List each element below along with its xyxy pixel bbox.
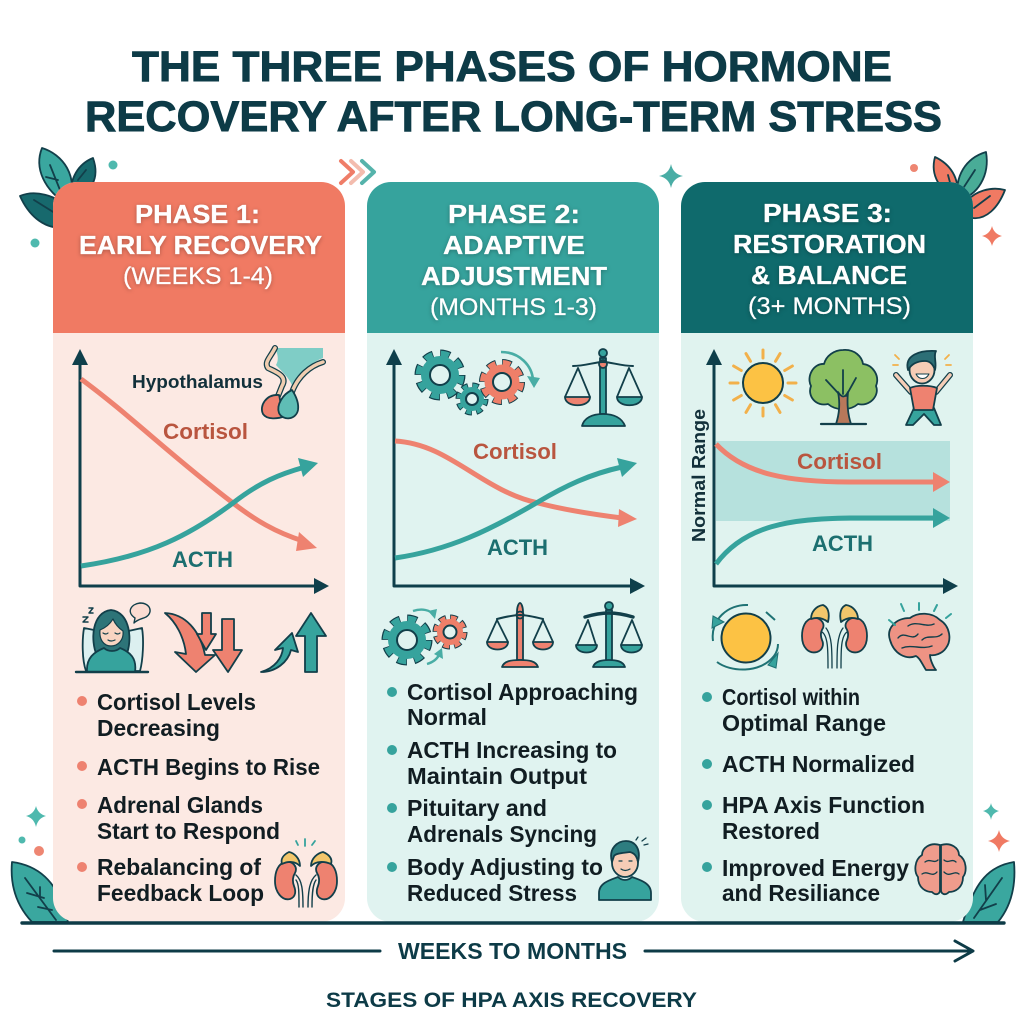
chart: phase 1 cortisol and ACTH: ACTH (172, 547, 233, 572)
panel body: phase 3 (681, 182, 973, 922)
phase 1 header (53, 182, 345, 333)
icon: calm person (599, 837, 651, 900)
list: phase 1 bullets: Adrenal Glands (97, 792, 263, 818)
decoration: bottom-right leaf and sparkles (963, 803, 1014, 922)
decoration: chevrons (341, 161, 374, 183)
phase 1 header: (WEEKS 1-4) (123, 263, 273, 290)
icon: happy person (893, 351, 951, 425)
chart: phase 3 cortisol and ACTH normal range (689, 349, 958, 594)
icon: three gears (419, 352, 540, 412)
phase 3 header (681, 182, 973, 333)
timeline arrow: weeks to months: WEEKS TO MONTHS (398, 938, 627, 964)
list: phase 2 bullets: Body Adjusting to (407, 854, 603, 880)
decoration: teal sparkle (659, 164, 683, 188)
icon: hypothalamus (262, 348, 323, 418)
list: phase 3 bullets: ACTH Normalized (722, 751, 915, 777)
list: phase 1 bullets: Feedback Loop (97, 880, 264, 906)
list: phase 1 bullets: Cortisol Levels (97, 689, 256, 715)
phase 3 header: PHASE 3: (763, 198, 892, 228)
list: phase 3 bullets: Optimal Range (722, 710, 886, 736)
list: phase 3 bullets: Restored (722, 818, 820, 844)
footer caption: STAGES OF HPA AXIS RECOVERY (326, 989, 697, 1012)
decoration: bottom-left leaf and sparkles (12, 806, 68, 922)
list: phase 2 bullets: Pituitary and (407, 795, 547, 821)
decoration: coral sparkle (982, 226, 1002, 246)
icon: sun (730, 350, 796, 416)
panel: phase 1 (53, 182, 345, 922)
icon: tree (809, 350, 877, 424)
list: phase 3 bullets: Cortisol within (722, 684, 860, 710)
title: THE THREE PHASES OF HORMONE (132, 43, 892, 91)
phase 3 header: & BALANCE (751, 260, 907, 290)
chart: phase 2 cortisol and ACTH: Cortisol (473, 439, 557, 464)
icon: kidneys (275, 839, 337, 907)
icon: sun cycle (712, 605, 778, 670)
phase 2 header: (MONTHS 1-3) (430, 294, 597, 321)
icon: sleeping woman (76, 603, 150, 672)
icon: brain side view (889, 603, 951, 670)
icon: downward arrows (165, 613, 242, 672)
chart: phase 3 cortisol and ACTH normal range: ACTH (812, 531, 873, 556)
chart: phase 1 cortisol and ACTH (72, 349, 329, 594)
list: phase 1 bullets (77, 689, 320, 906)
phase 2 header: ADAPTIVE (443, 230, 585, 260)
list: phase 2 bullets: ACTH Increasing to (407, 737, 617, 763)
chart: phase 2 cortisol and ACTH: ACTH (487, 535, 548, 560)
panel body: phase 1 (53, 182, 345, 922)
icon: balance scale top (565, 349, 642, 426)
icon: teal scale (576, 602, 642, 667)
list: phase 2 bullets: Normal (407, 704, 487, 730)
phase 2 header: ADJUSTMENT (421, 261, 607, 291)
icon: kidneys with adrenals (802, 605, 867, 668)
phase 1 header: EARLY RECOVERY (79, 230, 322, 260)
phase 1 header: PHASE 1: (135, 199, 260, 229)
panel: phase 3 (681, 182, 973, 922)
list: phase 1 bullets: ACTH Begins to Rise (97, 754, 320, 780)
icon: coral scale (487, 603, 553, 667)
chart: phase 2 cortisol and ACTH (386, 349, 645, 594)
chart: phase 3 cortisol and ACTH normal range: Normal Range (689, 409, 709, 542)
list: phase 2 bullets: Cortisol Approaching (407, 679, 638, 705)
icon: two gears (386, 609, 464, 664)
decoration: top-right leaves (910, 152, 1005, 218)
title (85, 43, 942, 141)
list: phase 2 bullets (387, 679, 638, 906)
chart: phase 1 cortisol and ACTH: Hypothalamus (132, 372, 263, 392)
chart: phase 1 cortisol and ACTH: Cortisol (163, 419, 248, 444)
list: phase 2 bullets: Maintain Output (407, 763, 587, 789)
baseline rule (22, 921, 1004, 925)
list: phase 3 bullets: and Resiliance (722, 880, 880, 906)
phase 3 header: RESTORATION (733, 229, 926, 259)
phase 3 header: (3+ MONTHS) (748, 293, 911, 320)
decoration: top-left leaves (20, 148, 118, 248)
icon: brain top view (915, 844, 966, 894)
list: phase 1 bullets: Start to Respond (97, 818, 280, 844)
list: phase 3 bullets: HPA Axis Function (722, 792, 925, 818)
timeline arrow: weeks to months (54, 938, 973, 964)
list: phase 1 bullets: Decreasing (97, 715, 220, 741)
icon: upward arrows (261, 613, 326, 672)
panel body: phase 2 (367, 182, 659, 922)
list: phase 3 bullets: Improved Energy (722, 855, 909, 881)
list: phase 2 bullets: Adrenals Syncing (407, 821, 597, 847)
phase 2 header: PHASE 2: (448, 199, 580, 229)
list: phase 2 bullets: Reduced Stress (407, 880, 577, 906)
panel: phase 2 (367, 182, 659, 922)
chart: phase 3 cortisol and ACTH normal range: Cortisol (797, 449, 882, 474)
list: phase 3 bullets (702, 684, 925, 906)
phase 2 header (367, 182, 659, 333)
list: phase 1 bullets: Rebalancing of (97, 854, 261, 880)
title: RECOVERY AFTER LONG-TERM STRESS (85, 93, 942, 141)
